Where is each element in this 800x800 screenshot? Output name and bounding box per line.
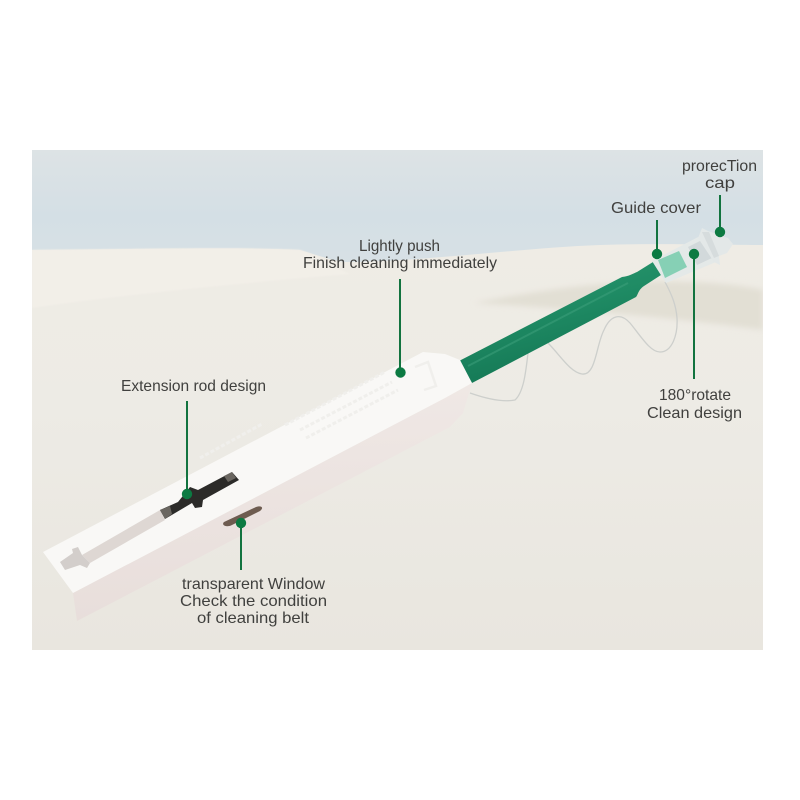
callout: transparent window: transparent Window	[182, 576, 325, 593]
cream upper dune	[32, 248, 304, 251]
panel: desert background	[32, 150, 763, 650]
callout: lightly push: Finish cleaning immediately	[303, 255, 497, 272]
callout: 180 degree rotate: 180°rotate	[659, 387, 731, 404]
transparent window	[223, 506, 262, 526]
callout: guide cover: Guide cover	[611, 200, 702, 217]
callout: extension rod design	[121, 378, 266, 499]
cleaning belt loop	[470, 282, 677, 401]
callout: lightly push: Lightly push	[359, 238, 440, 255]
sky	[32, 150, 763, 270]
callout: lightly push	[303, 238, 497, 378]
pen body top face	[43, 352, 472, 593]
green extension tube	[459, 262, 661, 383]
black slider rod	[160, 472, 239, 519]
callout: guide cover	[611, 200, 702, 259]
callout: 180 degree rotate	[647, 249, 742, 422]
callout: protection cap	[682, 158, 757, 237]
distant dune shadow	[474, 282, 763, 330]
callout: transparent window	[180, 518, 327, 627]
callout: protection cap: cap	[705, 175, 735, 192]
cleaning pen	[43, 228, 733, 621]
sand dunes	[32, 244, 763, 650]
callout: 180 degree rotate: Clean design	[647, 405, 742, 422]
guide cover	[652, 236, 716, 283]
embossed lettering marks	[200, 372, 398, 458]
slider slot	[82, 510, 165, 563]
end slot cutout	[60, 547, 90, 570]
callout: transparent window: Check the condition	[180, 593, 327, 610]
callout: transparent window: of cleaning belt	[197, 610, 310, 627]
callout: protection cap: prorecTion	[682, 158, 757, 175]
pen body front face	[73, 383, 472, 621]
protection cap	[698, 228, 733, 265]
infographic canvas	[32, 150, 763, 650]
callout: extension rod design: Extension rod design	[121, 378, 266, 395]
head facets	[415, 362, 436, 390]
